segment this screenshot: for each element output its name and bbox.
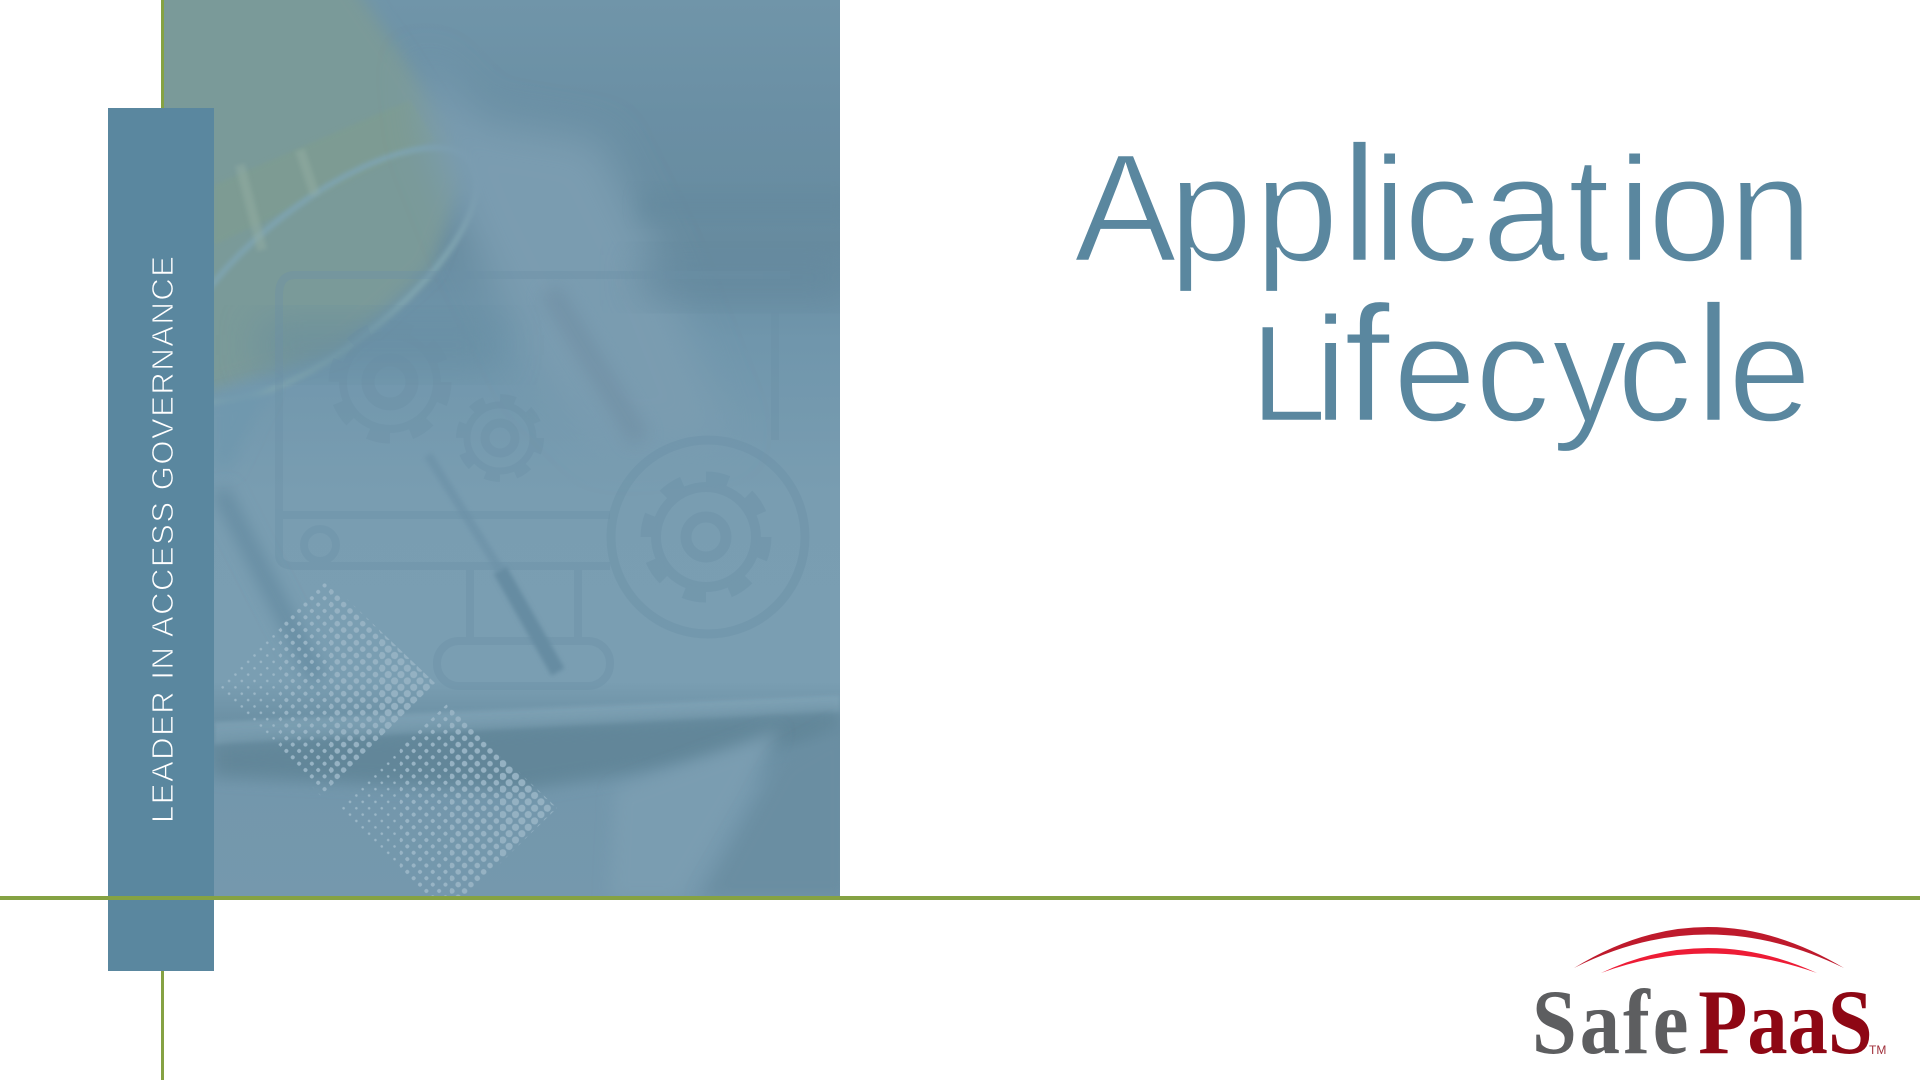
halftone diamond 1 [221,584,435,795]
title line 1: p [1169,125,1252,293]
title line 2: i [1314,285,1347,453]
title line 1: i [1618,125,1651,293]
logo wordmark: PaaS [1698,971,1873,1073]
title [1074,112,1812,457]
sidebar with tagline [108,108,214,971]
tagline: LEADER IN ACCESS GOVERNANCE [145,256,180,823]
title line 1: A [1074,122,1177,294]
title line 2: c [1617,285,1692,453]
photo: pens and table edge [214,455,850,900]
title line 2: l [1695,272,1732,457]
title line 1: c [1404,125,1479,293]
title line 1: p [1255,125,1338,293]
photo: green watch area [164,0,467,391]
icon: monitor outline and stand [279,275,790,686]
logo arcs [1574,927,1844,973]
trademark: TM [1869,1043,1886,1057]
title line 2: y [1552,285,1627,453]
title line 1: n [1729,125,1812,293]
title line 1: o [1648,125,1731,293]
title line 2: e [1393,285,1476,453]
panel: blurred photo background [135,0,850,920]
logo: SafePaaS [1532,927,1886,1073]
halftone diamond 2 [342,704,557,896]
title line 1: a [1482,125,1566,293]
title line 2: L [1250,297,1327,451]
icon: large gear in circle [611,440,805,634]
horizontal green line [0,896,1920,900]
title line 1: t [1568,125,1610,293]
logo wordmark: Safe [1532,971,1691,1073]
title line 2: f [1344,272,1391,457]
title line 2: c [1475,285,1550,453]
title line 1: l [1341,112,1378,297]
title line 1: i [1373,125,1406,293]
title line 2: e [1728,285,1811,453]
photo: blurred hand [260,60,850,450]
vertical green line [161,0,164,1080]
icon: small gears [335,327,539,477]
